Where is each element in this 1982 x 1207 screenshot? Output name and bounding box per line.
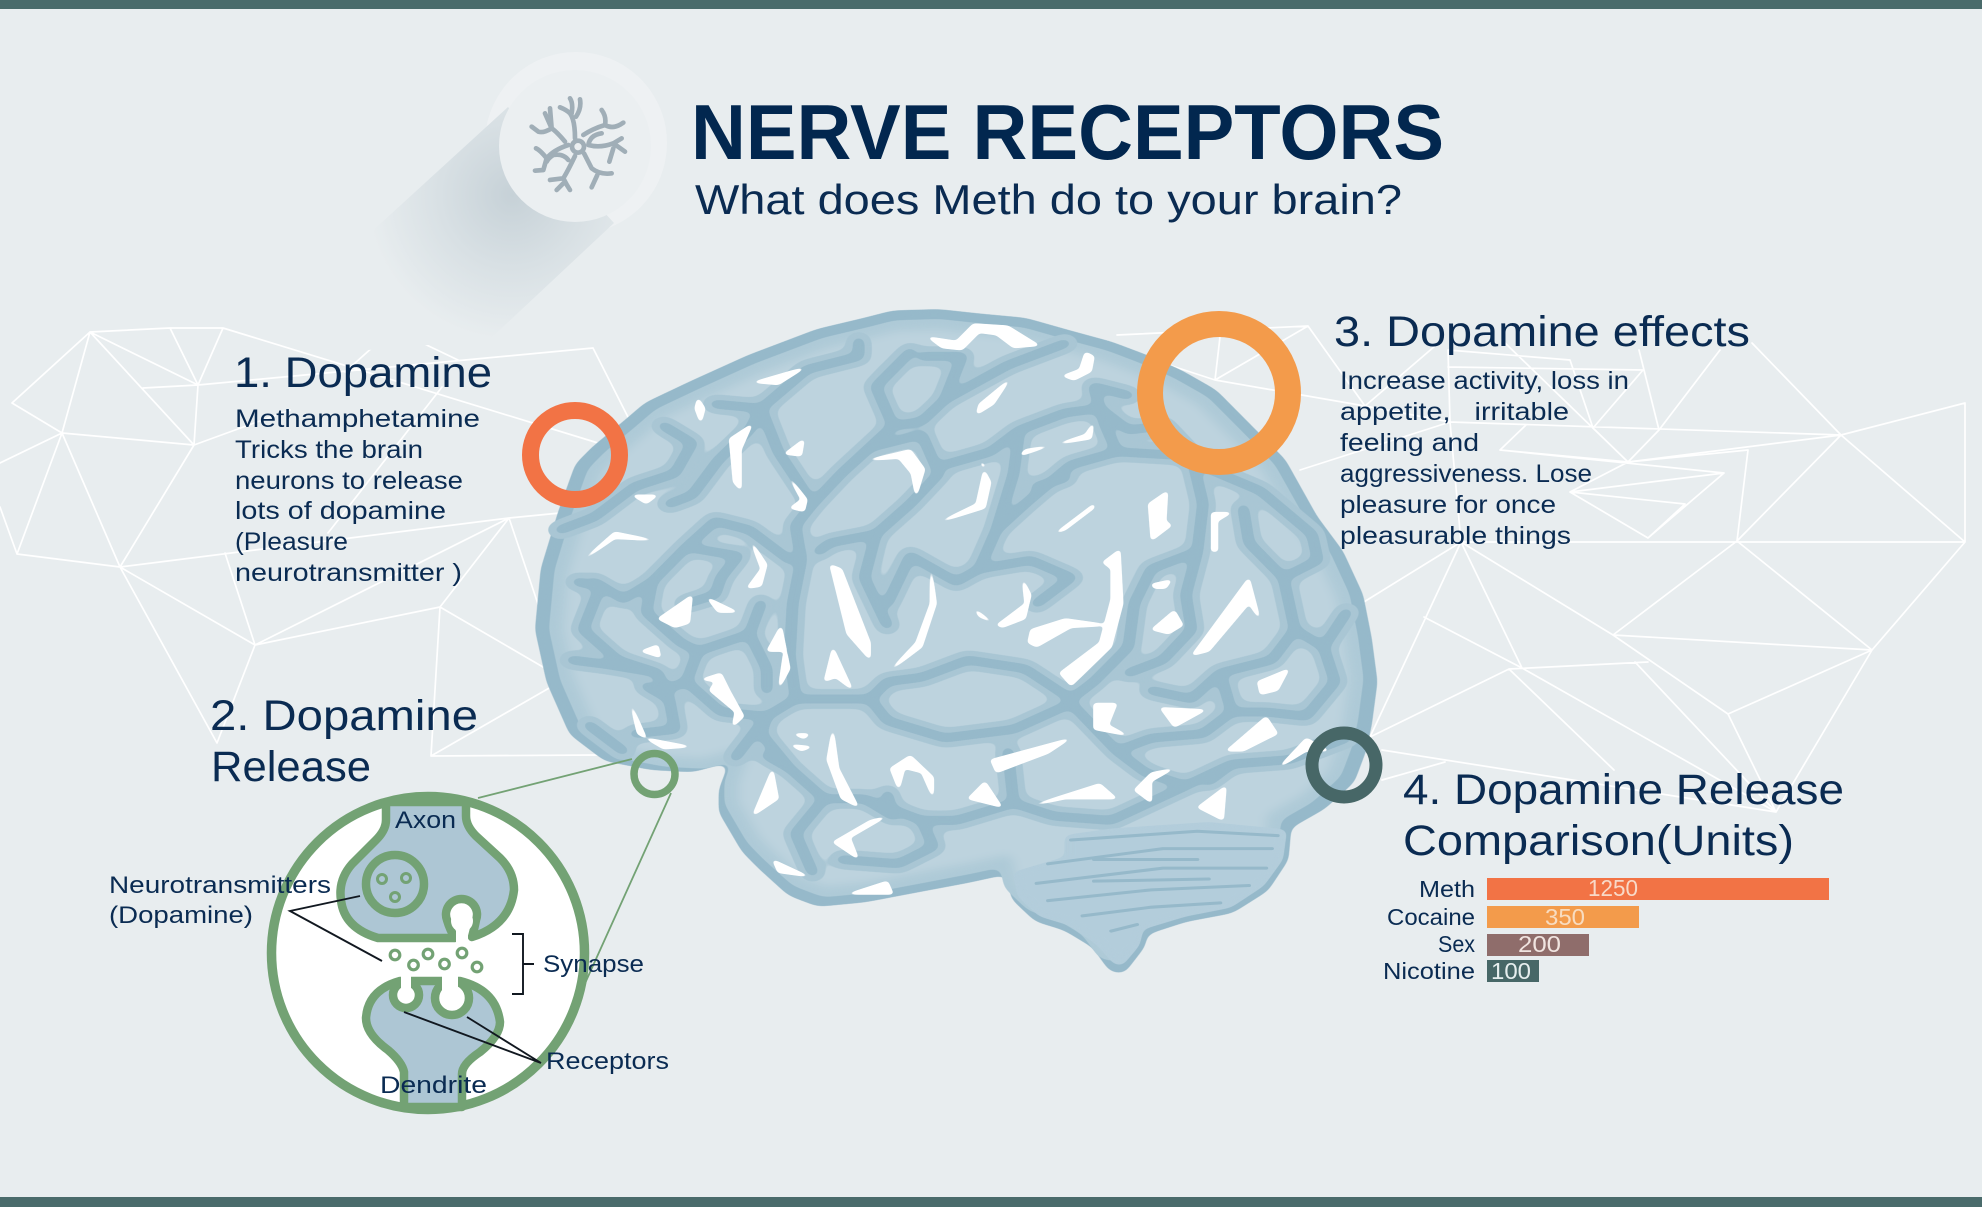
bar: Nicotine — [1383, 958, 1539, 984]
heading: 4. Dopamine Release Comparison — [1403, 766, 1844, 865]
heading: 2. Dopamine Release: 2. Dopamine — [210, 692, 478, 740]
heading: 3. Dopamine effects: 3. Dopamine effects — [1334, 308, 1750, 356]
label: dendrite: Dendrite — [380, 1072, 487, 1099]
bar: Nicotine: 100 — [1491, 958, 1531, 984]
title: NERVE RECEPTORS — [691, 88, 1444, 176]
bar: Cocaine: Cocaine — [1387, 904, 1475, 930]
brain illustration — [537, 311, 1375, 972]
text block: dopamine description: Tricks the brain — [235, 436, 423, 464]
bar: Sex: Sex — [1438, 931, 1475, 957]
text block: dopamine description: Methamphetamine — [235, 405, 480, 433]
text block: effects description: pleasure for once — [1340, 491, 1556, 519]
label: synapse: Synapse — [543, 951, 644, 978]
text block: effects description: appetite, irritable — [1340, 398, 1569, 426]
synapse zoom diagram — [109, 754, 675, 1110]
text block: dopamine description: (Pleasure — [235, 528, 348, 556]
bar: Meth: Meth — [1419, 876, 1475, 902]
text block: effects description: Increase activity, loss in — [1340, 367, 1629, 395]
text block: dopamine description — [235, 405, 480, 587]
brain highlights — [577, 324, 1329, 894]
text block: effects description — [1340, 367, 1629, 550]
bar chart: dopamine release comparison — [1383, 875, 1829, 984]
bar: Nicotine: Nicotine — [1383, 958, 1475, 984]
ring: dopamine effects marker — [1150, 324, 1288, 462]
zoom connector lines — [478, 759, 671, 990]
icon: neuron — [532, 98, 625, 190]
vesicle — [366, 855, 424, 913]
ring: comparison marker — [1312, 733, 1376, 797]
heading: 4. Dopamine Release Comparison: 4. Dopamine Release — [1403, 766, 1844, 814]
label: dopamine: (Dopamine) — [109, 902, 253, 929]
text block: effects description: feeling and — [1340, 429, 1479, 457]
subtitle: What does Meth do to your brain? — [695, 176, 1402, 223]
bar: Sex: 200 — [1518, 931, 1561, 957]
released dopamine dots — [390, 948, 482, 972]
text block: dopamine description: neurotransmitter ) — [235, 559, 462, 587]
cerebellum — [1014, 823, 1286, 966]
text block: effects description: aggressiveness. Lose — [1340, 460, 1592, 488]
label: receptors: Receptors — [546, 1048, 669, 1075]
bottom bar — [0, 1197, 1982, 1207]
label: neurotransmitters: Neurotransmitters — [109, 872, 331, 899]
heading: 1. Dopamine: 1. Dopamine — [234, 349, 492, 397]
dendrite — [366, 981, 500, 1107]
bar: Meth: 1250 — [1588, 875, 1638, 901]
label: axon: Axon — [395, 807, 456, 834]
heading: 4. Dopamine Release Comparison: Comparison(Units) — [1403, 817, 1794, 865]
ring: dopamine 1 marker — [530, 410, 620, 500]
top bar — [0, 0, 1982, 9]
icon: neuron badge with long shadow — [368, 52, 667, 350]
text block: effects description: pleasurable things — [1340, 522, 1571, 550]
text block: dopamine description: lots of dopamine — [235, 497, 446, 525]
bar: Meth — [1419, 875, 1829, 902]
heading: 2. Dopamine Release: Release — [211, 743, 371, 791]
axon terminal — [340, 802, 514, 938]
heading: 2. Dopamine Release — [210, 692, 478, 791]
ring: dopamine release marker — [634, 754, 675, 794]
bar: Sex — [1438, 931, 1589, 957]
bar: Cocaine — [1387, 904, 1639, 930]
text block: dopamine description: neurons to release — [235, 467, 463, 495]
synapse circle — [272, 796, 584, 1110]
pointer lines — [290, 896, 541, 1063]
bar: Cocaine: 350 — [1545, 904, 1585, 930]
